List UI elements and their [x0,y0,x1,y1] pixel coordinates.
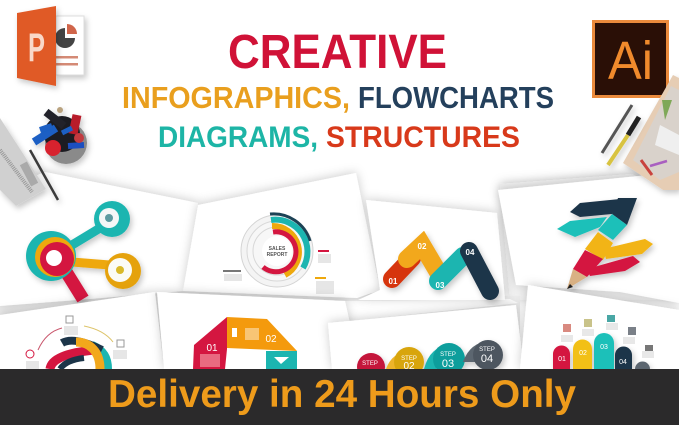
chart: knot with arcs [38,326,113,369]
labels: ribbon numbers: 02 [418,242,427,251]
chart: pencil arrows [557,198,653,289]
panel: pills sheet [520,285,679,369]
chart: folded shape [193,317,297,369]
ruler [0,118,58,206]
icon: Illustrator: Ai [608,31,653,91]
chart: connected circles [26,201,141,299]
label: 01: 01 [206,343,218,354]
title [122,26,554,154]
banner [0,369,679,425]
labels: step numbers: 04 [481,353,493,365]
labels: step numbers: STEP [440,352,456,358]
panel: folded octagon sheet [157,292,360,369]
labels: ribbon numbers: 03 [436,281,445,290]
labels: ribbon numbers: 04 [466,248,475,257]
labels: step numbers: STEP [401,356,417,362]
chart: zigzag ribbon [392,245,490,291]
panel: knot arc sheet [0,292,164,369]
panel: radial chart sheet [183,173,380,298]
chart: concentric radial: SALES [269,246,286,252]
icon: desk tray [623,75,679,190]
icons: pill tops [563,315,653,351]
pen [30,150,58,200]
icon: pens [602,105,639,165]
heading: structures: STRUCTURES [326,121,520,154]
labels: step numbers: STEP [362,361,378,367]
labels: step numbers: 03 [442,358,454,370]
panel: zigzag ribbon sheet [358,200,505,300]
panel: step circles sheet [328,305,524,381]
text blocks: pill notes [561,323,654,358]
chart: step circles [357,340,503,381]
labels: step numbers: STEP [479,347,495,353]
panel: connected circles sheet [0,172,198,306]
chart: concentric radial: REPORT [267,252,287,258]
icons: knot steps [26,316,124,358]
labels: pill numbers: 01 [558,356,566,363]
labels: pill numbers [558,344,627,366]
banner text: Delivery in 24 Hours Only [108,373,576,416]
heading: diagrams: DIAGRAMS, [158,121,318,154]
heading: flowcharts: FLOWCHARTS [358,80,554,115]
label: 02: 02 [265,334,277,345]
icon: PowerPoint: P [28,26,45,70]
icon: Illustrator [594,22,668,96]
icon: pen cup [34,107,87,164]
heading: creative: CREATIVE [228,26,447,79]
icon: PowerPoint [17,6,84,86]
labels: ribbon numbers [389,242,475,290]
panel: backing sheets [0,174,679,369]
chart: pills [553,333,650,369]
labels: pill numbers: 02 [579,350,587,357]
labels: step numbers [362,347,495,372]
panel: pencil arrows sheet [498,172,679,303]
chart: concentric radial [241,214,313,287]
text block: radial notes [223,250,334,294]
labels: step numbers: 02 [403,361,415,372]
text block: knot notes [26,326,127,369]
labels: pill numbers: 03 [600,344,608,351]
labels: ribbon numbers: 01 [389,277,398,286]
heading: infographics: INFOGRAPHICS, [122,80,350,115]
labels: pill numbers: 04 [619,359,627,366]
